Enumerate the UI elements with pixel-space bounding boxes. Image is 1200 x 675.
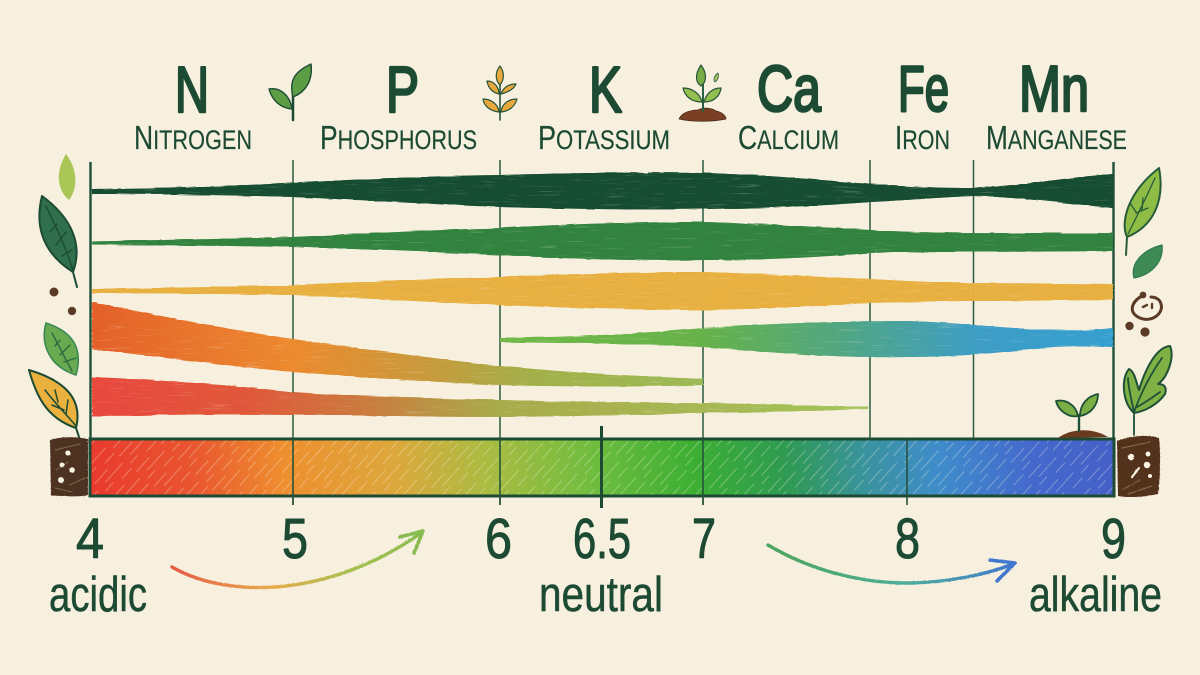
symbol: Mn: Mn — [1019, 52, 1089, 125]
arrow: acidic toward neutral — [172, 531, 423, 588]
nutrient band: phosphorus (mid green) — [92, 222, 1113, 260]
pH numbers — [76, 507, 1126, 571]
icon: sprig between N and P — [269, 64, 311, 120]
icon: veined leaf — [1125, 168, 1161, 255]
symbol: Ca: Ca — [757, 52, 822, 125]
label: Iron: IRON — [895, 119, 950, 156]
label: alkaline: alkaline — [1029, 568, 1162, 622]
pH 4: 4 — [76, 507, 104, 571]
label: acidic: acidic — [49, 568, 147, 622]
nutrient symbols and names header — [134, 52, 1127, 156]
icon: seedling in soil between K and Ca — [679, 65, 726, 121]
label: Potassium: POTASSIUM — [538, 119, 670, 156]
nutrient band: acidic orange band — [92, 302, 703, 386]
nutrient band: nitrogen (dark green) — [92, 173, 1113, 209]
pH 5: 5 — [282, 507, 308, 571]
icon: sprout on bar — [1056, 394, 1108, 438]
pH 6.5: 6.5 — [573, 507, 631, 571]
symbol: Fe: Fe — [898, 52, 949, 125]
pH grid lines — [90, 160, 1114, 505]
icon: pale leaf — [59, 154, 75, 200]
icon: soil block right — [1117, 436, 1160, 497]
label: Nitrogen: NITROGEN — [134, 119, 252, 156]
icon: small dark leaf — [1133, 245, 1162, 278]
icon: golden wheat sprig between P and K — [483, 66, 517, 120]
label: Calcium: CALCIUM — [738, 119, 839, 156]
icon: soil specks — [50, 288, 76, 315]
pH 9: 9 — [1101, 507, 1126, 571]
nutrient band: iron and manganese alkaline band (green to blue) — [500, 321, 1113, 357]
icon: yellow veined leaf — [29, 370, 80, 440]
tick marks — [293, 439, 907, 505]
neutral 6.5 marker — [600, 426, 603, 508]
label: neutral: neutral — [539, 568, 663, 622]
icon: soil block left — [50, 437, 88, 496]
icon: large plant in soil — [1124, 346, 1172, 435]
symbol: N: N — [175, 53, 209, 126]
arrow: neutral toward alkaline — [768, 545, 1015, 583]
symbol: K: K — [589, 53, 622, 126]
label: Manganese: MANGANESE — [986, 119, 1127, 156]
pH 8: 8 — [895, 507, 920, 571]
pH 6: 6 — [485, 507, 512, 571]
right decorations — [1056, 168, 1172, 497]
nutrient band: potassium (yellow) — [92, 272, 1113, 310]
nutrient band: acidic red band — [92, 377, 868, 417]
symbol: P: P — [386, 53, 419, 126]
icon: dark veined leaf — [39, 196, 77, 287]
icon: green veined leaf — [44, 323, 78, 375]
icon: soil swirl and specks — [1125, 292, 1161, 337]
left decorations — [29, 154, 88, 496]
label: Phosphorus: PHOSPHORUS — [320, 119, 477, 156]
pH colour scale bar — [90, 426, 1114, 508]
pH 7: 7 — [692, 507, 716, 571]
